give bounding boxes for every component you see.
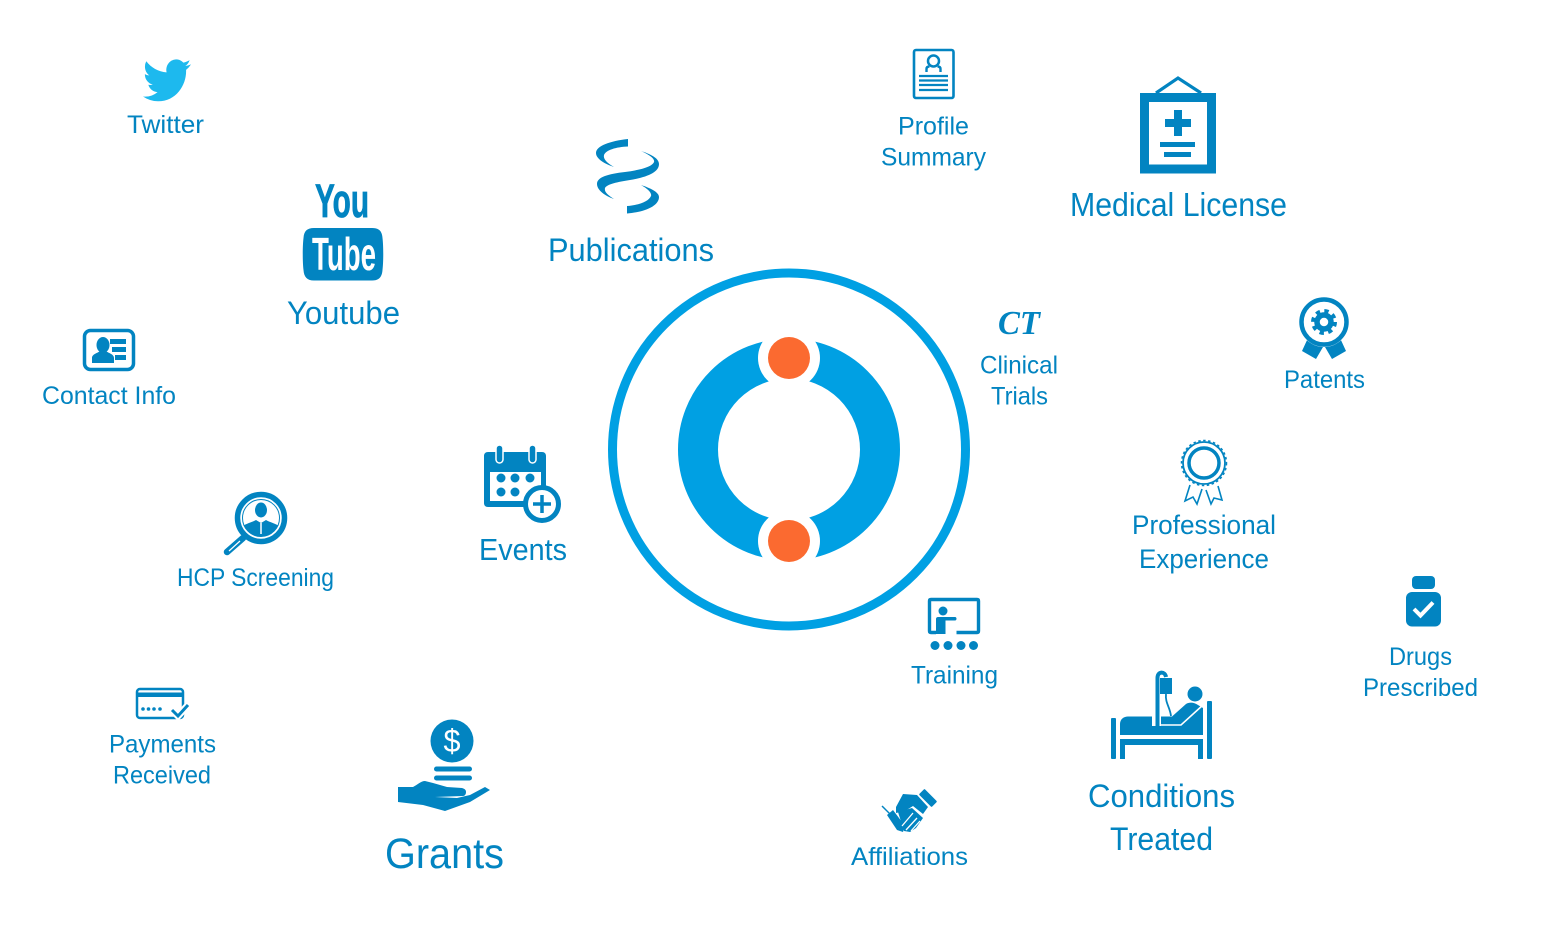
item: Profile Summary: Summary: [881, 144, 986, 172]
label: Professional: [1132, 510, 1276, 540]
item: Payments Received: Received: [113, 762, 211, 790]
icon: profile document: [914, 50, 954, 98]
label: Publications: [548, 232, 714, 268]
item: Youtube: [287, 174, 400, 331]
label: Affiliations: [851, 843, 968, 871]
icon: youtube logo: You: [315, 174, 369, 227]
item: Affiliations: [851, 789, 968, 871]
label: Clinical: [980, 352, 1058, 380]
item: Professional Experience: Experience: [1139, 544, 1269, 574]
icon: youtube logo: [303, 174, 383, 280]
icon: calendar with plus: [484, 445, 558, 520]
icon: coin over hand: $: [444, 723, 461, 759]
label: HCP Screening: [177, 564, 334, 592]
item: Events: [479, 445, 567, 567]
label: Profile: [898, 112, 969, 140]
label: Events: [479, 532, 567, 567]
icon: coin over hand: [398, 720, 490, 811]
label: Contact Info: [42, 382, 176, 410]
label: Twitter: [127, 111, 204, 139]
item: Conditions Treated: Treated: [1110, 821, 1213, 857]
item: HCP Screening: [177, 494, 334, 592]
icon: rosette: [1182, 440, 1226, 504]
item: Medical License: [1070, 78, 1287, 223]
item: Clinical Trials: Trials: [991, 382, 1048, 410]
item: Clinical Trials: [980, 305, 1058, 410]
icon: CT letters: CT: [998, 305, 1041, 342]
label: Payments: [109, 730, 216, 758]
item: Grants: [385, 720, 504, 878]
label: Grants: [385, 830, 504, 878]
label: Patents: [1284, 366, 1365, 394]
item: Conditions Treated: [1088, 673, 1235, 857]
icon: handshake: [882, 789, 937, 832]
icon: gear badge: [1299, 297, 1349, 359]
icon: pill bottle: [1406, 576, 1441, 626]
label: Drugs: [1389, 643, 1452, 671]
icon: presenter at board: [930, 600, 978, 650]
label: Medical License: [1070, 186, 1287, 223]
item: Patents: [1284, 297, 1365, 394]
item: Drugs Prescribed: Prescribed: [1363, 674, 1478, 702]
item: Drugs Prescribed: [1363, 576, 1478, 702]
label: Training: [911, 662, 998, 690]
icon: framed license: [1144, 78, 1212, 169]
icon: magnifier with person: [227, 494, 284, 552]
icon: helix: [596, 139, 659, 214]
icon: youtube logo: Tube: [312, 228, 376, 280]
icon: contact card: [84, 330, 134, 370]
item: Publications: [548, 139, 714, 268]
item: Payments Received: [109, 689, 216, 790]
item: Twitter: [127, 59, 204, 139]
item: Professional Experience: [1132, 440, 1276, 574]
label: Conditions: [1088, 778, 1235, 814]
icon: credit card with check: [137, 689, 188, 718]
item: Profile Summary: [881, 50, 986, 172]
label: Youtube: [287, 295, 400, 331]
item: Training: [911, 600, 998, 690]
icon: patient in bed: [1111, 673, 1212, 759]
item: Contact Info: [42, 330, 176, 410]
icon: twitter bird: [143, 59, 191, 101]
central logo: [612, 273, 966, 626]
